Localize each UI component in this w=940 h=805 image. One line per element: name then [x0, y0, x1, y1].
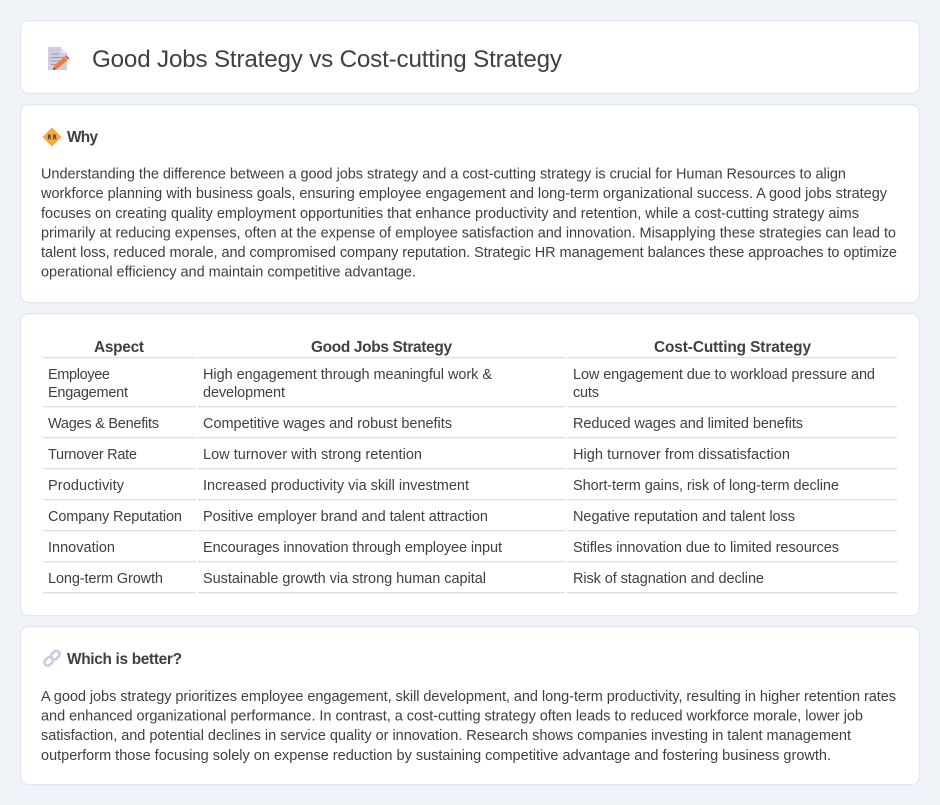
- row: wages and benefits: Competitive wages and robust benefits: [203, 416, 452, 432]
- table header row: [94, 339, 811, 356]
- row: long-term growth: [48, 571, 764, 587]
- row: wages and benefits: Wages & Benefits: [48, 416, 159, 432]
- text block: which is better paragraph: A good jobs strategy prioritizes employee engagement, skill development, and long-term productivity, resulting in higher retention rates: [41, 689, 896, 705]
- icon: link: [43, 650, 61, 667]
- text block: why paragraph: workforce planning with business goals, ensuring employee engagement and long-term organizational success. A good jobs strategy: [40, 186, 888, 202]
- row: company reputation: Positive employer brand and talent attraction: [203, 509, 488, 525]
- row: employee engagement: Employee: [48, 367, 110, 383]
- row: productivity: [48, 478, 839, 494]
- text block: why paragraph: primarily at reducing expenses, often at the expense of employee satisfaction and innovation. Misapplying these strategies can lead to: [41, 225, 896, 241]
- row: innovation: Innovation: [48, 540, 115, 556]
- text block: which is better paragraph: satisfaction, and potential declines in service quality or innovation. Research shows companies investing in talent management: [41, 728, 851, 744]
- row: wages and benefits: [48, 416, 803, 432]
- panel: title header: [21, 21, 919, 93]
- icon: warning diamond with children: [44, 128, 60, 146]
- icon: memo with pencil: [48, 47, 70, 70]
- row: productivity: Productivity: [48, 478, 125, 494]
- row: wages and benefits: Reduced wages and limited benefits: [573, 416, 803, 432]
- row: productivity: Increased productivity via skill investment: [203, 478, 469, 494]
- row: long-term growth: Risk of stagnation and decline: [573, 571, 764, 587]
- row: company reputation: Company Reputation: [48, 509, 182, 525]
- text block: why paragraph: talent loss, reduced morale, and compromised company reputation. Strategic HR management balances these approaches to optimize: [41, 245, 897, 261]
- row: employee engagement: cuts: [573, 385, 599, 401]
- row: employee engagement: High engagement through meaningful work &: [203, 367, 492, 383]
- row: employee engagement: development: [203, 385, 285, 401]
- text block: why paragraph: Understanding the difference between a good jobs strategy and a cost-cutting strategy is crucial for Human Resources to align: [41, 167, 846, 183]
- row: turnover rate: High turnover from dissatisfaction: [573, 447, 790, 463]
- panel: which is better: [21, 627, 919, 785]
- row: long-term growth: Sustainable growth via strong human capital: [203, 571, 486, 587]
- heading: why: Why: [67, 129, 98, 146]
- row: long-term growth: Long-term Growth: [48, 571, 163, 587]
- panel: why: [21, 105, 919, 303]
- text block: why paragraph: operational efficiency and maintain competitive advantage.: [41, 265, 416, 281]
- row: employee engagement: [48, 367, 875, 401]
- text block: which is better paragraph: outperform those focusing solely on expense reduction by sustaining competitive advantage and fostering business growth.: [41, 748, 831, 764]
- panel: comparison table: [21, 314, 919, 616]
- text block: why paragraph: focuses on creating quality employment opportunities that enhance productivity and retention, while a cost-cutting strategy aims: [41, 206, 859, 222]
- text block: why paragraph: [40, 167, 897, 281]
- row: turnover rate: [48, 447, 790, 463]
- table header row: Good Jobs Strategy: [311, 339, 452, 356]
- row: company reputation: Negative reputation and talent loss: [573, 509, 795, 525]
- text block: which is better paragraph: [41, 689, 896, 764]
- row: employee engagement: Engagement: [48, 385, 128, 401]
- table header row: Aspect: [94, 339, 144, 356]
- row: innovation: [48, 540, 839, 556]
- row: company reputation: [48, 509, 795, 525]
- row: employee engagement: Low engagement due to workload pressure and: [573, 367, 875, 383]
- row: innovation: Encourages innovation through employee input: [203, 540, 502, 556]
- text block: which is better paragraph: and enhanced organizational performance. In contrast, a cost-cutting strategy often leads to reduced workforce morale, lower job: [41, 709, 863, 725]
- row: turnover rate: Turnover Rate: [48, 447, 137, 463]
- row: turnover rate: Low turnover with strong retention: [203, 447, 422, 463]
- heading: which is better: Which is better?: [67, 651, 182, 668]
- table header row: Cost-Cutting Strategy: [654, 339, 811, 356]
- title: Good Jobs Strategy vs Cost-cutting Strategy: [92, 46, 563, 73]
- row: innovation: Stifles innovation due to limited resources: [573, 540, 839, 556]
- row: productivity: Short-term gains, risk of long-term decline: [573, 478, 839, 494]
